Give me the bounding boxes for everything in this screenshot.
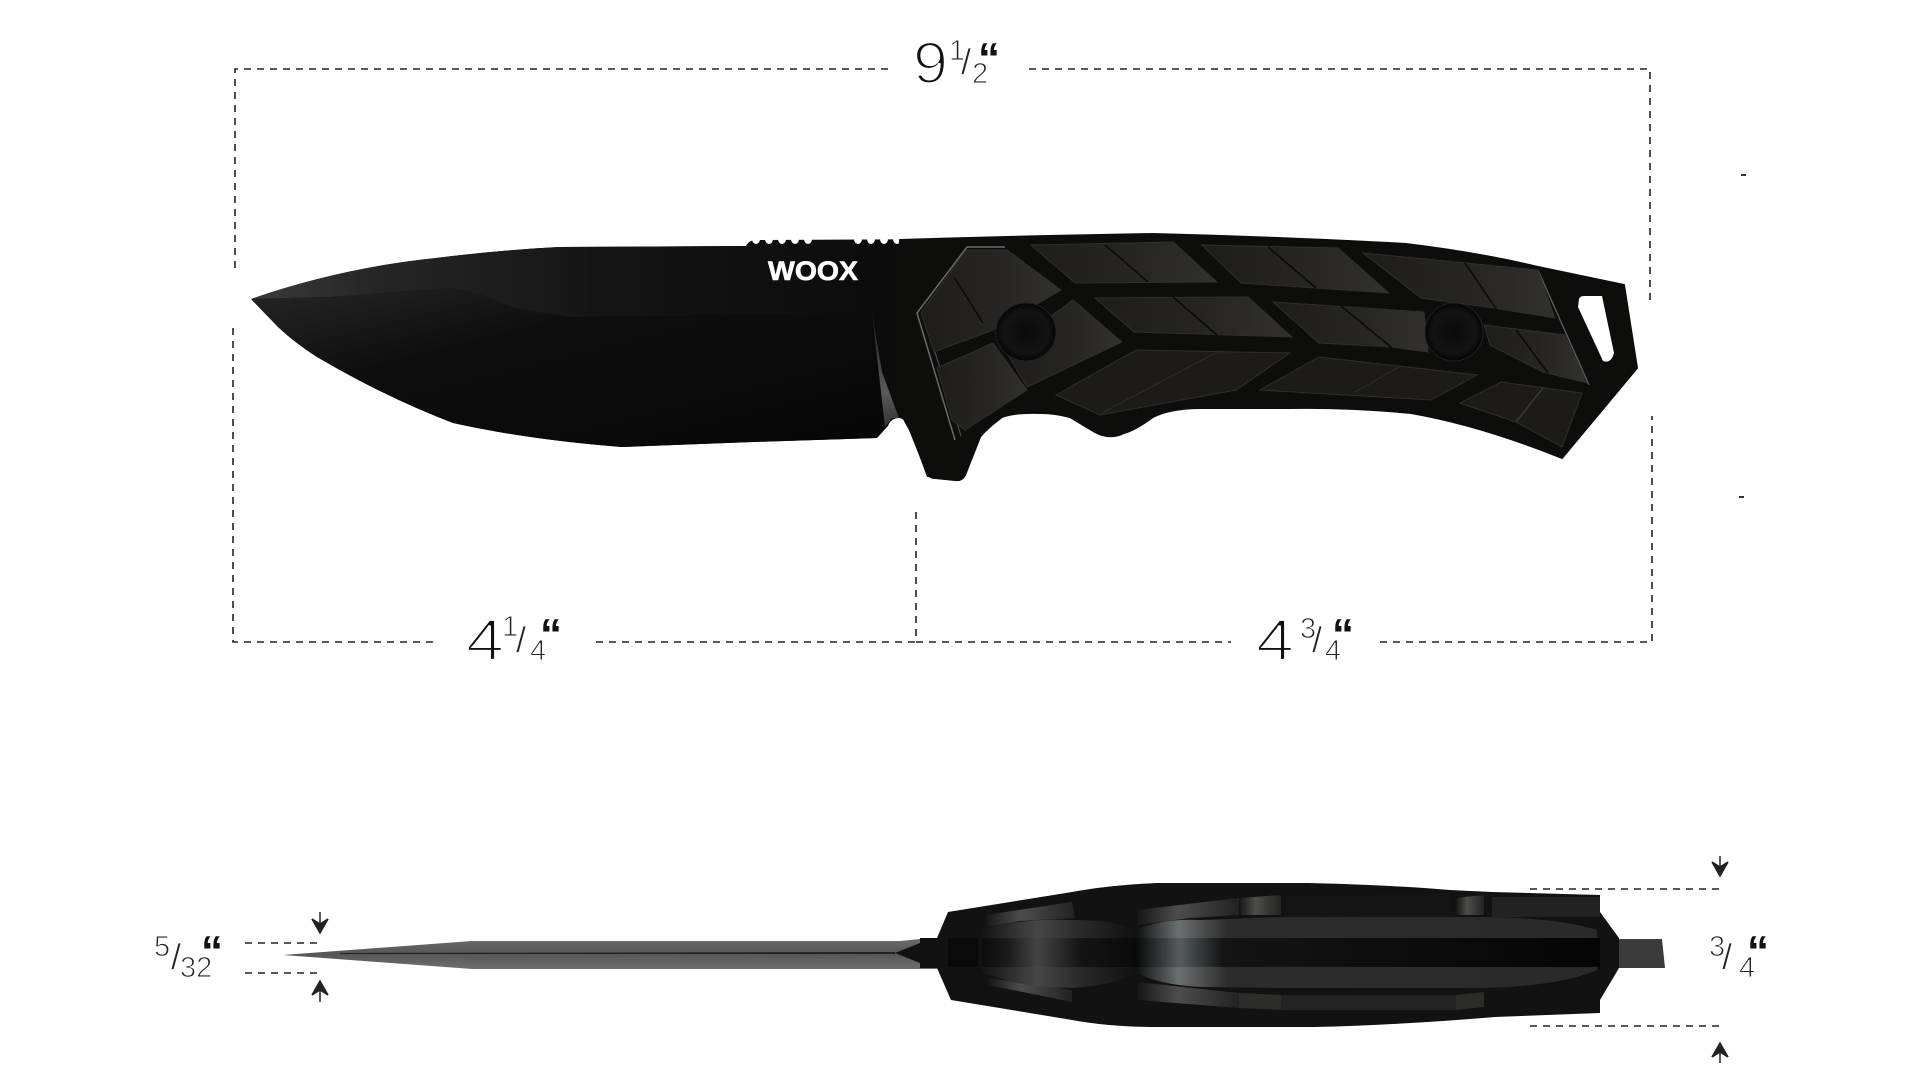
arrow: up to handle xyxy=(1712,1043,1728,1063)
handle length dimension: 4 3/4 inches: “ xyxy=(1332,610,1354,659)
handle edge highlight xyxy=(917,247,1005,440)
WOOX logo: WOOX xyxy=(768,256,858,286)
lower ridge panels xyxy=(988,978,1484,1010)
handle thickness dimension: 3/4 inch xyxy=(1530,856,1769,1063)
overall length dimension: 9 1/2 inches: / xyxy=(961,41,971,82)
contoured belly band xyxy=(982,917,1597,988)
spine thickness dimension: 5/32 inch: 5 xyxy=(154,931,170,963)
spine thickness dimension: 5/32 inch: “ xyxy=(201,927,223,976)
handle length dimension: 4 3/4 inches: 4 xyxy=(1325,635,1341,667)
spine serrations xyxy=(740,232,920,244)
dark center band xyxy=(982,938,1600,967)
handle length dimension: 4 3/4 inches: 4 xyxy=(1256,608,1294,673)
handle panels xyxy=(921,242,1587,447)
handle thickness dimension: 3/4 inch: “ xyxy=(1747,927,1769,976)
blade length dimension: 4 1/4 inches: 4 xyxy=(530,635,546,667)
tang end xyxy=(1619,939,1665,968)
knife side profile xyxy=(251,232,1637,480)
blade length dimension: 4 1/4 inches: 1 xyxy=(502,611,518,643)
handle thickness dimension: 3/4 inch: / xyxy=(1722,936,1732,977)
blade length dimension: 4 1/4 inches: 4 xyxy=(466,608,504,673)
arrow: down to handle xyxy=(1712,856,1728,876)
blade length dimension: 4 1/4 inches: “ xyxy=(540,610,562,659)
handle seen from spine xyxy=(920,883,1665,1027)
screw: rear xyxy=(1425,303,1483,361)
stray tick marks xyxy=(1739,174,1746,498)
overall length dimension: 9 1/2 inches: 9 xyxy=(913,31,948,96)
spine thickness dimension: 5/32 inch: 32 xyxy=(180,952,212,984)
overall length dimension: 9 1/2 inches xyxy=(235,31,1650,300)
blade seen from spine xyxy=(283,938,945,969)
handle length dimension: 4 3/4 inches xyxy=(916,416,1652,673)
handle length dimension: 4 3/4 inches: / xyxy=(1312,619,1322,660)
blade length dimension: 4 1/4 inches: / xyxy=(516,619,526,660)
overall length dimension: 9 1/2 inches: 1 xyxy=(949,35,965,67)
spine thickness dimension: 5/32 inch: / xyxy=(171,936,181,977)
overall length dimension: 9 1/2 inches: 2 xyxy=(972,58,988,90)
handle thickness dimension: 3/4 inch: 3 xyxy=(1709,931,1725,963)
arrow: up to spine xyxy=(312,981,328,1002)
knife spine view xyxy=(283,883,1665,1027)
screw: front xyxy=(996,303,1056,361)
overall length dimension: 9 1/2 inches: “ xyxy=(978,34,1000,83)
upper ridge panels xyxy=(985,893,1600,927)
blade xyxy=(251,239,980,477)
spine thickness dimension: 5/32 inch xyxy=(154,912,328,1002)
lanyard hole xyxy=(1578,296,1614,362)
arrow: down to spine xyxy=(312,912,328,933)
blade length dimension: 4 1/4 inches xyxy=(233,328,916,673)
handle xyxy=(899,234,1637,480)
handle length dimension: 4 3/4 inches: 3 xyxy=(1300,613,1316,645)
handle thickness dimension: 3/4 inch: 4 xyxy=(1739,952,1755,984)
